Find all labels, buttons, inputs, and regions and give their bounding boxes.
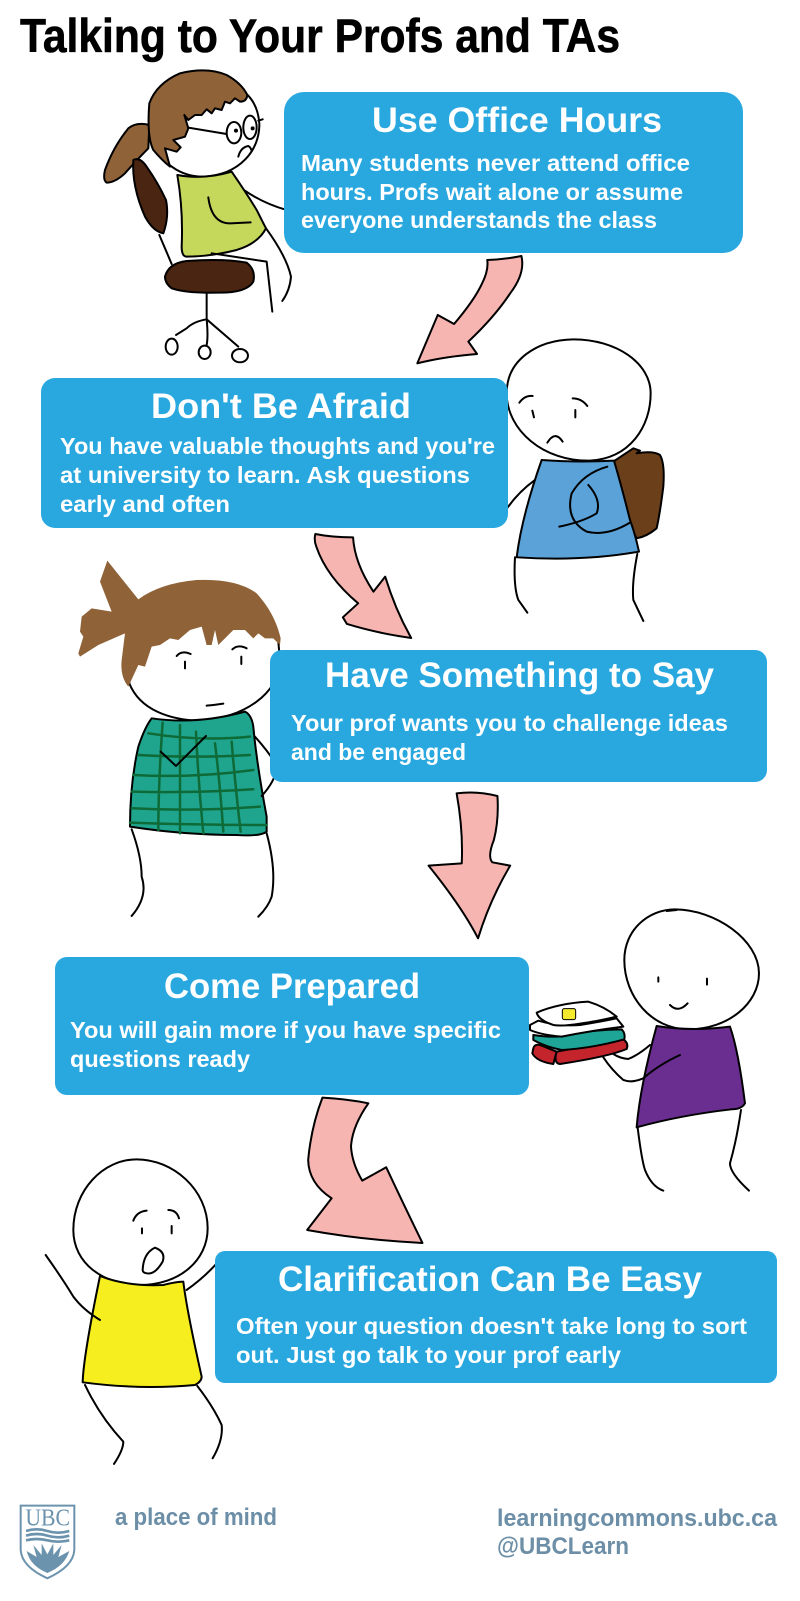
stack of books [530, 1002, 627, 1064]
ponytail [104, 124, 149, 183]
head [507, 339, 651, 461]
chair seat [165, 260, 254, 293]
arrow 1 [417, 256, 522, 363]
figure: student on office chair [104, 70, 291, 362]
body text: everyone understands the class [301, 207, 657, 233]
shirt [517, 460, 639, 559]
body text: out. Just go talk to your prof early [236, 1342, 621, 1368]
face [658, 910, 707, 1009]
head [73, 1159, 208, 1285]
icon: UBC shield logo: UBC [25, 1506, 70, 1532]
face [177, 646, 247, 706]
figure: surprised student [46, 1159, 225, 1464]
arrow 3 [429, 792, 510, 938]
body text: You will gain more if you have specific [70, 1017, 501, 1043]
legs [85, 1385, 222, 1464]
panel: Don't Be Afraid [41, 378, 508, 528]
face [133, 1210, 179, 1274]
arms [46, 1253, 225, 1320]
collar check [161, 736, 206, 766]
arms [208, 191, 287, 223]
panel: Use Office Hours [284, 92, 743, 253]
arms [603, 1045, 680, 1081]
figure: student carrying books [530, 909, 759, 1191]
backpack [612, 448, 664, 538]
body text: and be engaged [291, 739, 466, 765]
head [157, 93, 259, 177]
legs [638, 1110, 749, 1191]
body text: You have valuable thoughts and you're [60, 433, 495, 459]
body text: Often your question doesn't take long to sort [236, 1313, 747, 1339]
head [129, 600, 280, 721]
body text [301, 150, 690, 233]
hair [149, 70, 247, 167]
arm [255, 737, 277, 796]
panel: Come Prepared [55, 957, 529, 1095]
mouth [238, 146, 252, 157]
body text [291, 710, 728, 765]
website and handle: learningcommons.ubc.ca [497, 1505, 778, 1532]
arrow 4 [307, 1098, 422, 1243]
tagline: a place of mind [115, 1504, 277, 1531]
panel: Clarification Can Be Easy [215, 1251, 777, 1383]
shirt [83, 1276, 202, 1387]
body text [236, 1313, 747, 1368]
website and handle [497, 1505, 778, 1560]
body text: hours. Profs wait alone or assume [301, 179, 683, 205]
plaid lines [130, 723, 267, 833]
body text [60, 433, 495, 517]
legs [515, 554, 643, 621]
website and handle: @UBCLearn [497, 1533, 629, 1560]
hair [78, 561, 281, 687]
figure: student with plaid shirt [78, 561, 281, 917]
glasses [188, 116, 263, 143]
heading: Come Prepared [164, 967, 420, 1006]
heading: Have Something to Say [325, 656, 715, 695]
shirt [637, 1026, 745, 1127]
body text [70, 1017, 501, 1072]
body text: Your prof wants you to challenge ideas [291, 710, 728, 736]
arms [504, 467, 630, 533]
heading: Don't Be Afraid [151, 387, 411, 426]
figure: student with backpack [504, 339, 664, 621]
legs [212, 228, 291, 312]
head [624, 909, 759, 1029]
icon: UBC shield logo [21, 1506, 74, 1578]
heading: Clarification Can Be Easy [278, 1260, 703, 1299]
body text: at university to learn. Ask questions [60, 462, 470, 488]
legs [132, 829, 273, 917]
chair back [133, 159, 172, 264]
body text: early and often [60, 491, 230, 517]
chair base and wheels [166, 293, 248, 362]
body text: questions ready [70, 1046, 250, 1072]
heading: Use Office Hours [372, 101, 662, 140]
arrow 2 [315, 534, 411, 638]
panel: Have Something to Say [270, 650, 767, 782]
body text: Many students never attend office [301, 150, 690, 176]
title: Talking to Your Profs and TAs [20, 9, 620, 62]
shirt [177, 172, 266, 257]
shirt [130, 712, 267, 835]
face [519, 396, 587, 443]
